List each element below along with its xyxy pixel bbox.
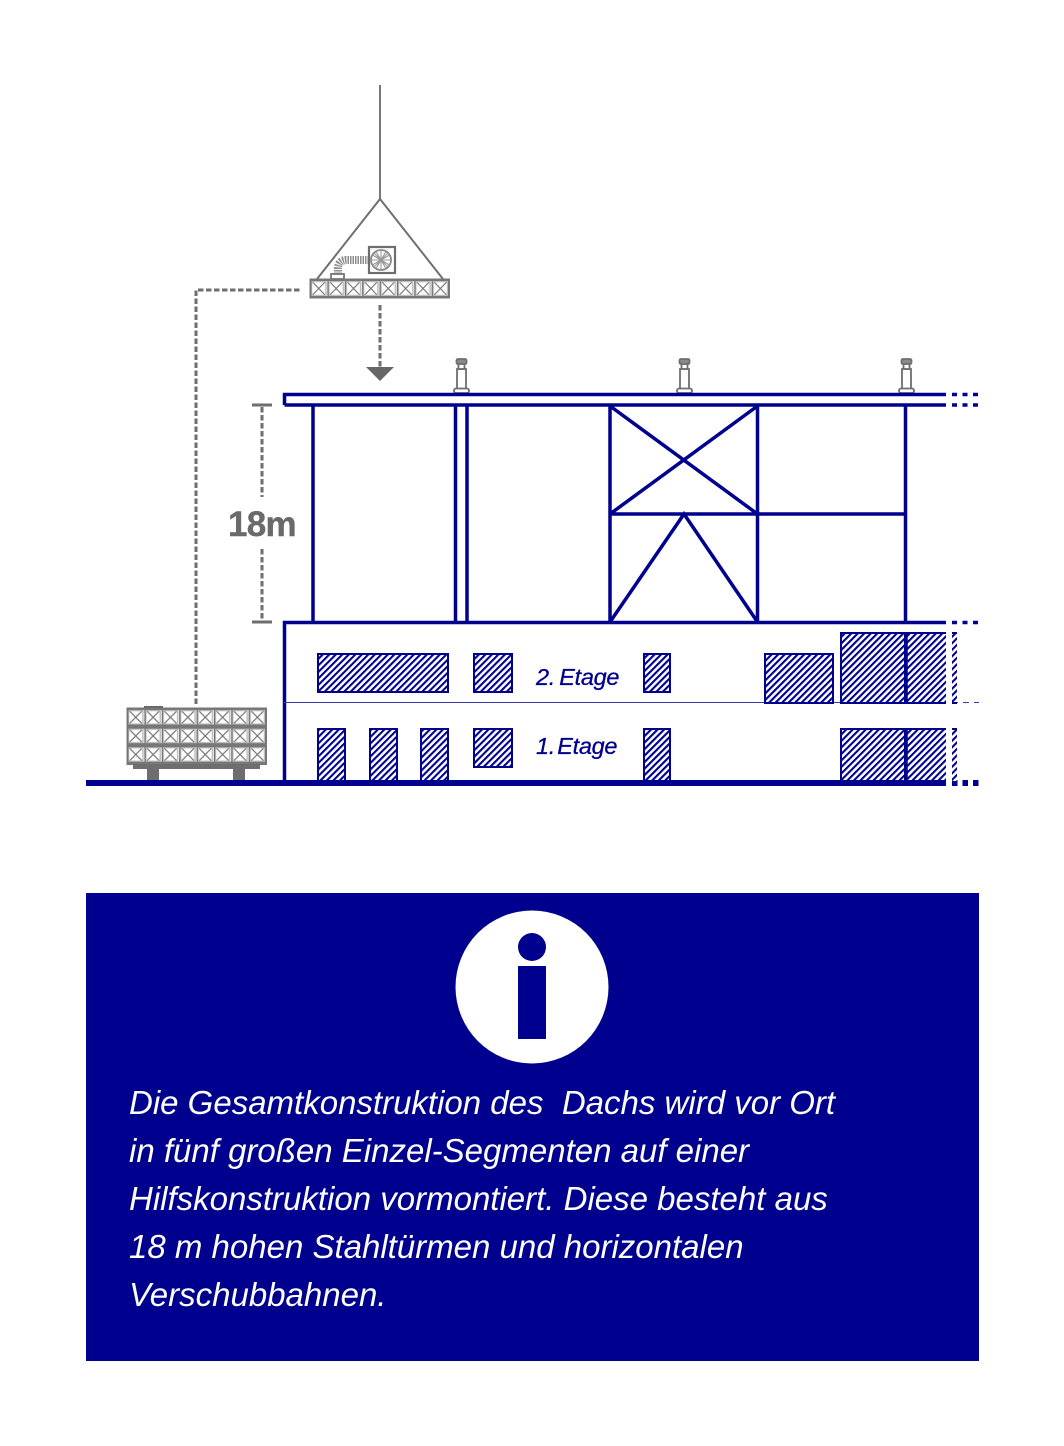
text: description: Hilfskonstruktion vormontiert. Diese besteht aus [129, 1180, 828, 1217]
steel tower structure [313, 405, 906, 622]
icon: crane hook with suspended roof segment [310, 85, 449, 298]
suspended truss segment [310, 279, 449, 298]
dimension: 18m height [228, 405, 296, 622]
text: description: in fünf großen Einzel-Segmenten auf einer [129, 1132, 751, 1169]
dashed transport path from storage to crane [196, 290, 301, 704]
text: description: 18 m hohen Stahltürmen und horizontalen [129, 1228, 744, 1265]
icon: hydraulic jack left [454, 359, 469, 393]
text: description [129, 1084, 837, 1313]
arrow: lowering direction [366, 305, 394, 381]
text: description: Die Gesamtkonstruktion des Dachs wird vor Ort [129, 1084, 837, 1121]
icon: info symbol [456, 910, 608, 1064]
text: description: Verschubbahnen. [129, 1276, 386, 1313]
panel: info box [86, 893, 979, 1361]
lifting sling triangle [317, 199, 443, 279]
label: 1. Etage: 1. Etage [536, 733, 617, 759]
roof sliding track [284, 394, 979, 405]
label: 2. Etage: 2. Etage [535, 664, 619, 690]
icon: hydraulic jack right [899, 359, 914, 393]
ground line [86, 780, 979, 786]
stacked truss segments on supports [127, 706, 266, 780]
icon: ventilation duct [331, 260, 369, 279]
icon: hydraulic jack middle [677, 359, 692, 393]
icon: fan unit [369, 247, 395, 273]
crane cable [379, 85, 381, 199]
hatched elements: 1st floor [318, 729, 957, 781]
building floors outline [284, 622, 979, 783]
dimension: 18m height: 18m [228, 505, 296, 544]
hatched elements: 2nd floor [318, 633, 957, 703]
